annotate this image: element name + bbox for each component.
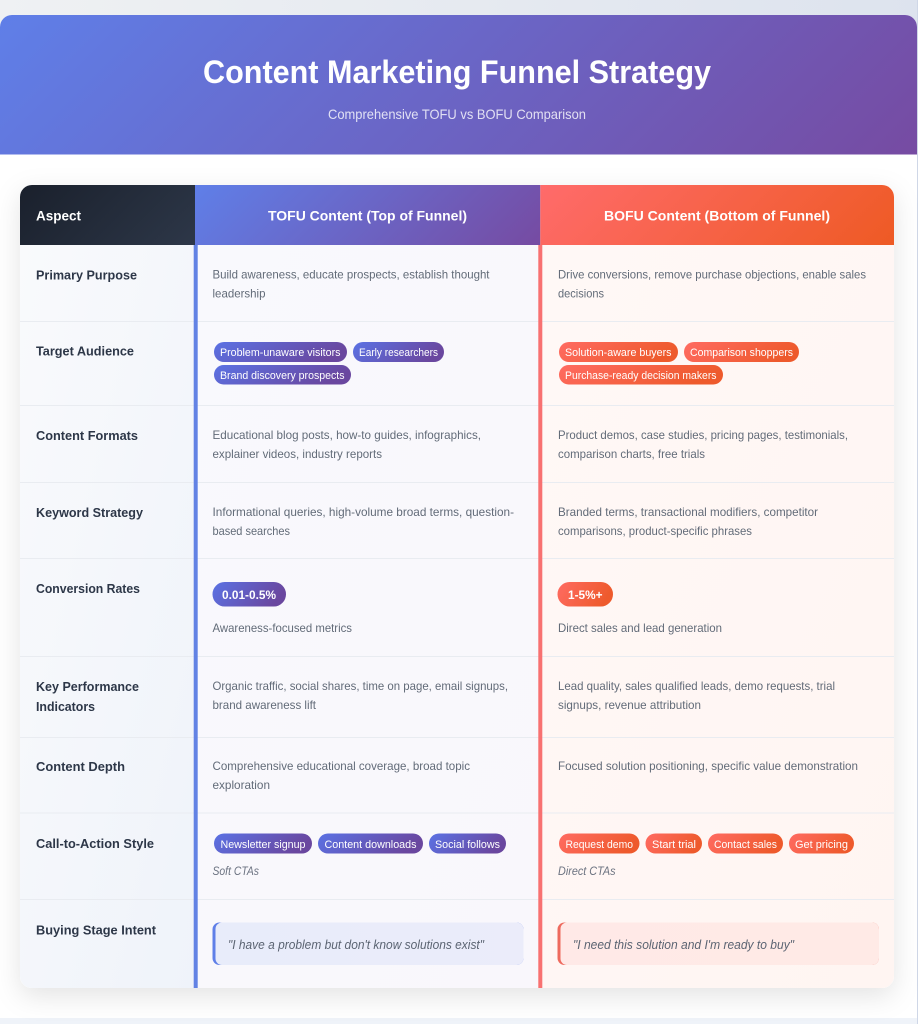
row: content formats: explainer videos, industry reports <box>212 447 382 461</box>
row: keyword strategy: Keyword Strategy <box>36 505 144 520</box>
comparison table shadow <box>20 185 894 988</box>
BOFU CTA tags: Start trial <box>652 839 696 851</box>
row: buying stage intent <box>36 922 879 965</box>
BOFU audience tags: Comparison shoppers <box>690 347 793 359</box>
row: content formats: comparison charts, free trials <box>558 447 705 461</box>
header cell: BOFU <box>540 185 894 245</box>
row: keyword strategy: comparisons, product-specific phrases <box>558 524 752 538</box>
row: key performance indicators <box>36 682 834 712</box>
row: target audience: Target Audience <box>36 344 134 358</box>
BOFU audience tags: Solution-aware buyers <box>565 347 672 359</box>
row: primary purpose: decisions <box>558 286 604 300</box>
TOFU audience tags: Early researchers <box>359 347 438 359</box>
BOFU rate badge: 1-5%+ <box>568 588 602 602</box>
BOFU CTA tags <box>559 834 854 854</box>
row: key performance indicators: Indicators <box>36 699 95 714</box>
TOFU CTA tags: Social follows <box>435 839 500 851</box>
BOFU rate badge <box>558 582 613 606</box>
row: primary purpose: leadership <box>212 286 266 300</box>
BOFU CTA tags: Get pricing <box>795 839 848 851</box>
BOFU audience tags: Purchase-ready decision makers <box>565 370 717 382</box>
TOFU quote: "I have a problem but don't know solutions exist" <box>228 938 485 952</box>
row: key performance indicators: Lead quality, sales qualified leads, demo requests, trial <box>558 679 835 693</box>
row: content depth: Content Depth <box>36 759 125 774</box>
TOFU CTA tags: Content downloads <box>324 839 417 851</box>
BOFU CTA tags: Request demo <box>566 839 633 851</box>
TOFU quote <box>212 922 524 965</box>
TOFU audience tags: Brand discovery prospects <box>220 370 345 382</box>
comparison table <box>20 185 894 988</box>
row: content depth: Comprehensive educational coverage, broad topic <box>212 759 470 773</box>
TOFU rate badge <box>212 582 286 606</box>
subtitle: Comprehensive TOFU vs BOFU Comparison <box>328 106 586 122</box>
row: primary purpose <box>36 268 866 300</box>
row: conversion rates: Awareness-focused metrics <box>212 621 352 635</box>
row: conversion rates <box>36 581 722 635</box>
row: conversion rates: Direct sales and lead generation <box>558 621 722 635</box>
row: buying stage intent: Buying Stage Intent <box>36 922 157 938</box>
row: primary purpose: Primary Purpose <box>36 268 137 282</box>
row: content depth <box>36 759 858 792</box>
row: keyword strategy: based searches <box>212 524 290 538</box>
row: key performance indicators: brand awareness lift <box>212 698 317 712</box>
header cell: BOFU: BOFU Content (Bottom of Funnel) <box>604 209 830 224</box>
row: content formats: Content Formats <box>36 428 138 443</box>
TOFU rate badge: 0.01-0.5% <box>222 588 276 602</box>
TOFU audience tags: Problem-unaware visitors <box>220 347 341 359</box>
header cell: TOFU: TOFU Content (Top of Funnel) <box>268 209 467 224</box>
header cell: aspect: Aspect <box>36 209 82 224</box>
row: call-to-action style: Soft CTAs <box>212 864 259 878</box>
TOFU CTA tags: Newsletter signup <box>220 839 306 851</box>
title: Content Marketing Funnel Strategy <box>203 54 711 90</box>
TOFU audience tags <box>214 342 444 384</box>
row: call-to-action style: Direct CTAs <box>558 864 616 878</box>
row: content depth: exploration <box>212 778 270 792</box>
BOFU quote <box>558 922 879 965</box>
row: content formats <box>36 428 848 461</box>
BOFU audience tags <box>559 342 799 384</box>
BOFU CTA tags: Contact sales <box>714 839 777 851</box>
row: primary purpose: Drive conversions, remove purchase objections, enable sales <box>558 268 866 282</box>
header cell: TOFU <box>195 185 540 245</box>
row: conversion rates: Conversion Rates <box>36 581 140 596</box>
row: keyword strategy: Branded terms, transactional modifiers, competitor <box>558 505 818 519</box>
header cell: aspect <box>20 185 195 245</box>
row: content depth: Focused solution positioning, specific value demonstration <box>558 759 858 773</box>
row: call-to-action style <box>36 834 854 878</box>
column backgrounds <box>20 245 894 988</box>
BOFU quote: "I need this solution and I'm ready to buy" <box>573 938 795 952</box>
row: keyword strategy <box>36 505 818 538</box>
row: call-to-action style: Call-to-Action Style <box>36 836 154 851</box>
row: target audience <box>36 342 799 384</box>
TOFU CTA tags <box>214 834 506 854</box>
row: content formats: Educational blog posts, how-to guides, infographics, <box>212 428 481 442</box>
row: keyword strategy: Informational queries, high-volume broad terms, question- <box>212 505 514 519</box>
row: key performance indicators: signups, revenue attribution <box>558 698 701 712</box>
row: key performance indicators: Key Performance <box>36 679 139 694</box>
row: primary purpose: Build awareness, educate prospects, establish thought <box>212 268 490 282</box>
row: content formats: Product demos, case studies, pricing pages, testimonials, <box>558 428 848 442</box>
header banner <box>0 15 917 154</box>
row: key performance indicators: Organic traffic, social shares, time on page, email signups, <box>212 679 508 693</box>
